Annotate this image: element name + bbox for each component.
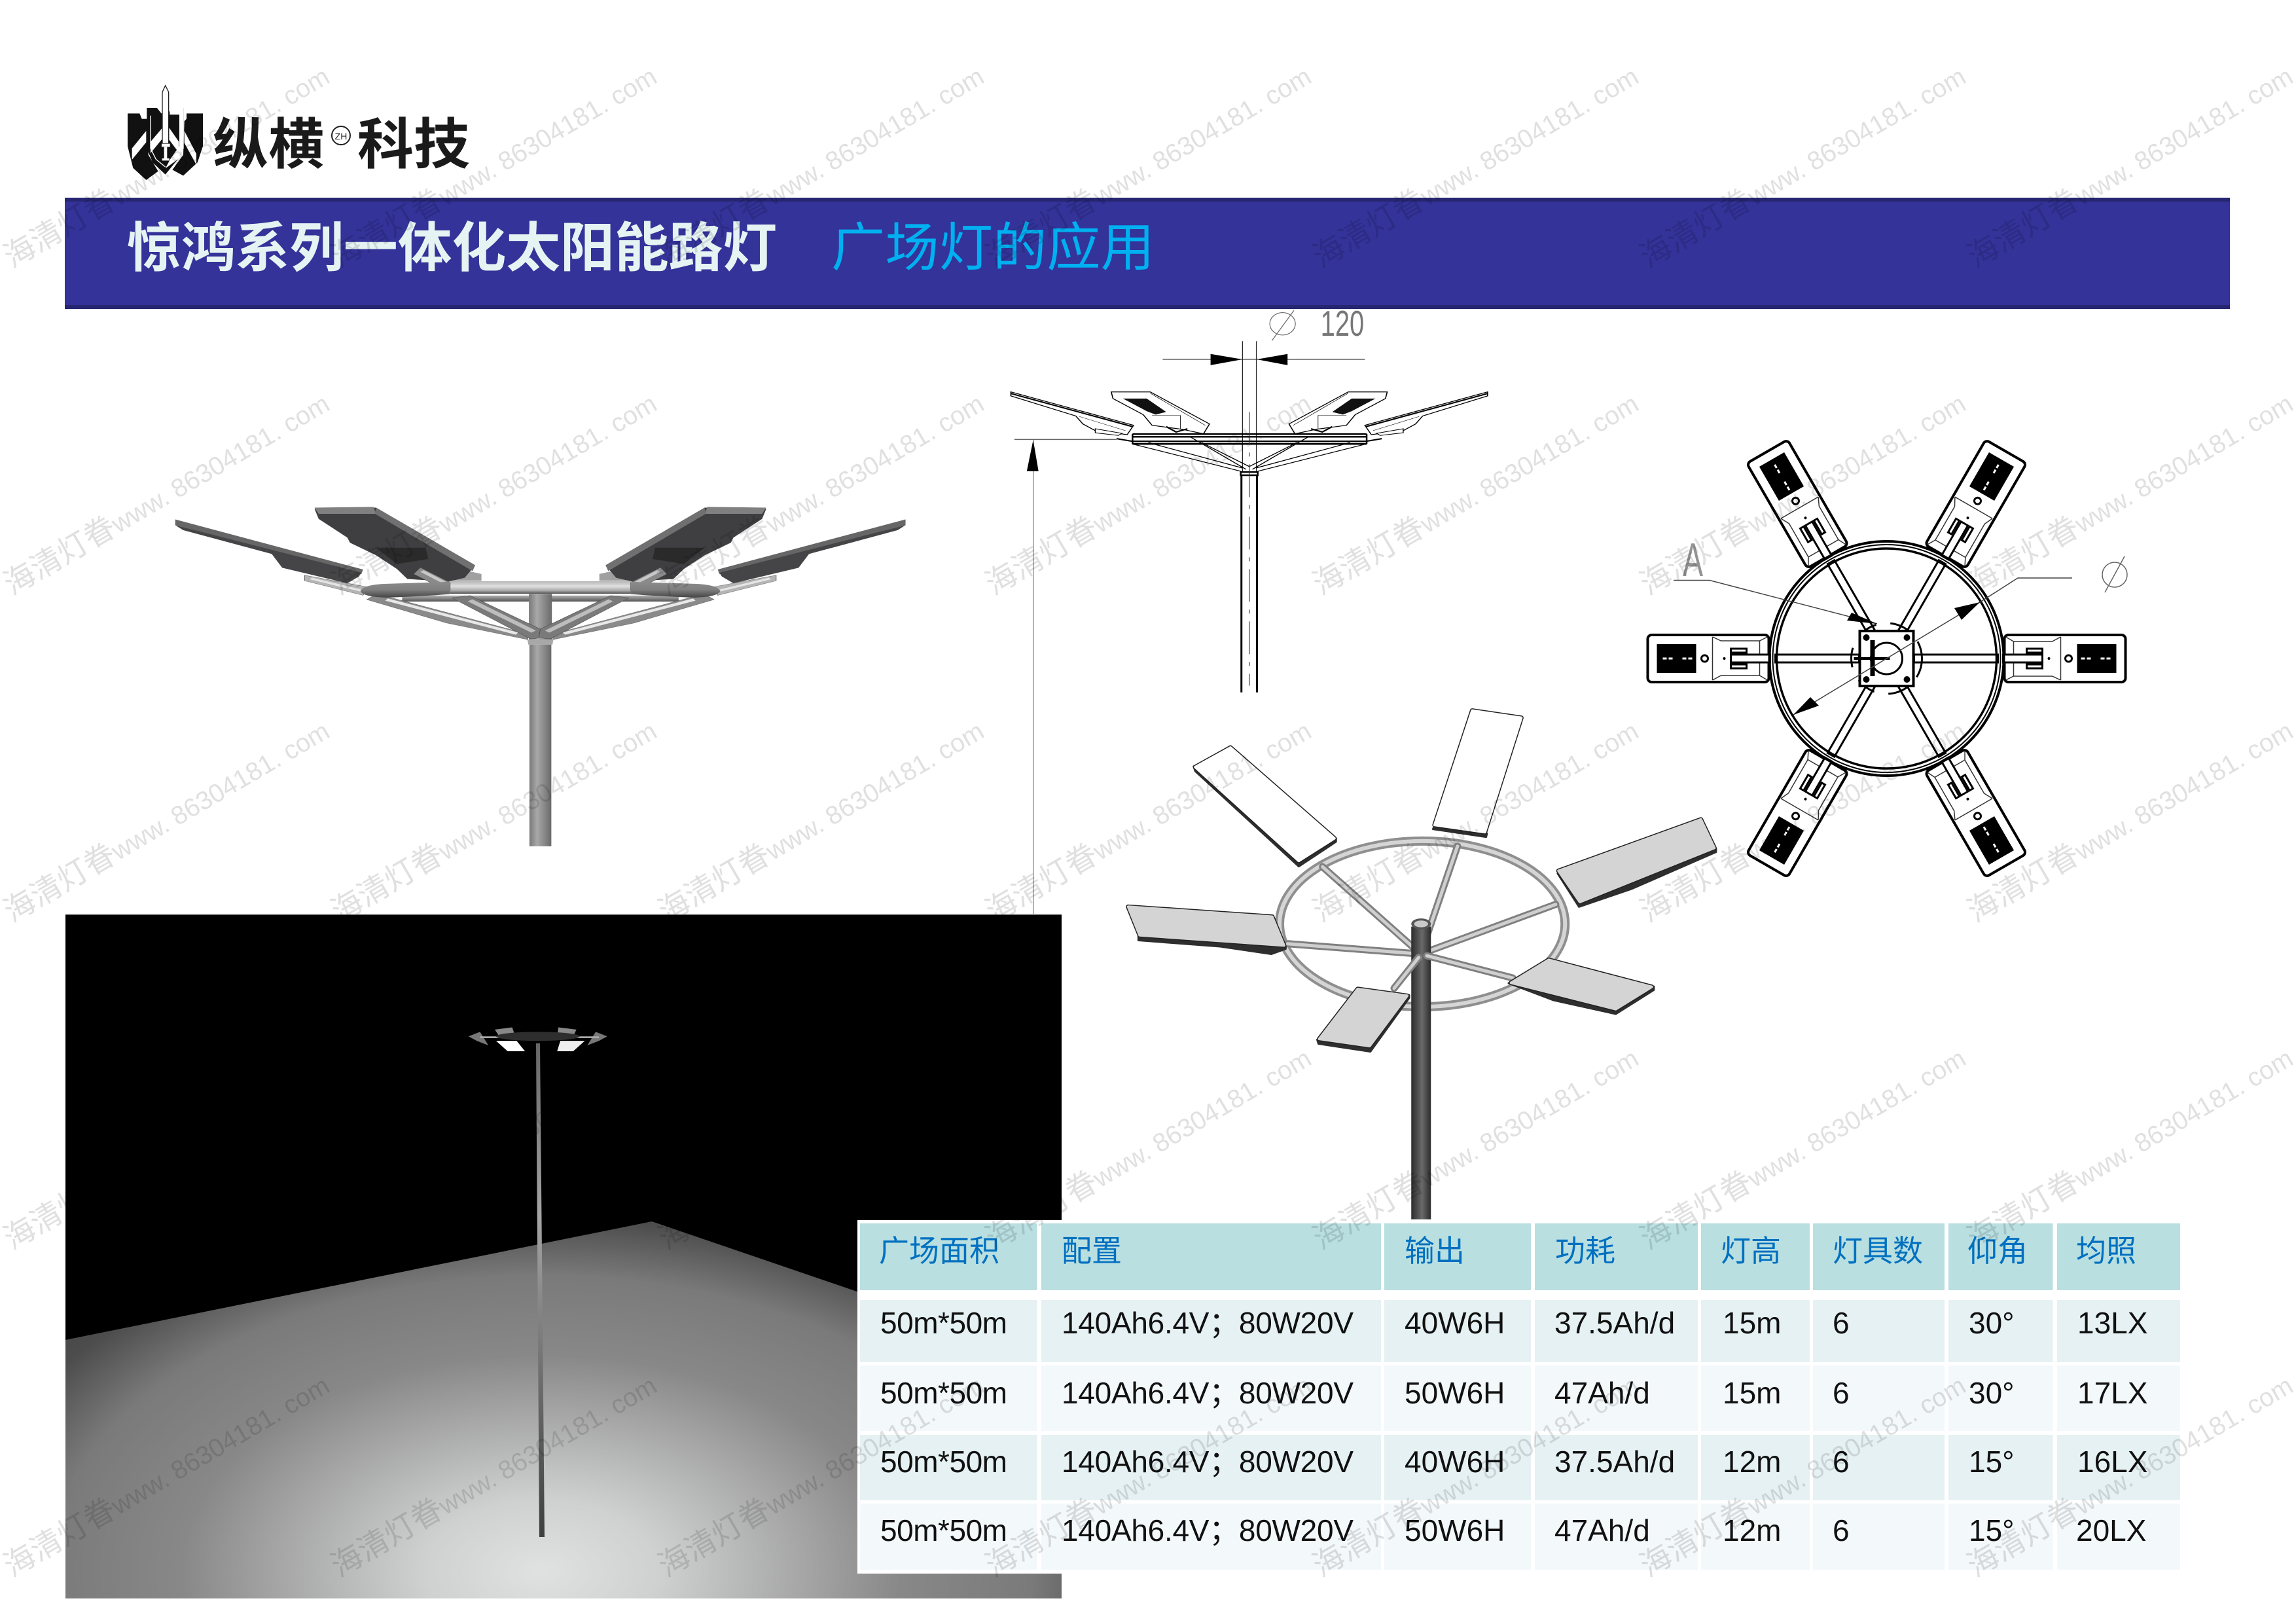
table row 4: 140Ah6.4V；80W20V — [1062, 1513, 1354, 1547]
watermark layer: 海清灯眷www. 86304181. com — [325, 1366, 662, 1583]
watermark layer: 海清灯眷www. 86304181. com — [1306, 57, 1643, 274]
table row 4: 47Ah/d — [1554, 1513, 1650, 1547]
registered mark — [332, 126, 350, 145]
table row 1: 15m — [1723, 1306, 1781, 1340]
arrow: height dimension — [1014, 439, 1117, 915]
watermark layer: 海清灯眷www. 86304181. com — [1306, 1039, 1643, 1256]
table row 2: 15m — [1723, 1376, 1781, 1410]
watermark layer: 海清灯眷www. 86304181. com — [652, 1039, 989, 1256]
watermark layer: 海清灯眷www. 86304181. com — [0, 384, 334, 602]
table row 3 — [860, 1435, 2180, 1500]
watermark layer: 海清灯眷www. 86304181. com — [1961, 57, 2296, 274]
table row 2 — [860, 1365, 2180, 1431]
table row 1: 50m*50m — [880, 1306, 1007, 1340]
subtitle: 广场灯的应用 — [831, 206, 1155, 281]
table row 3: 140Ah6.4V；80W20V — [1062, 1445, 1354, 1479]
watermark layer: 海清灯眷www. 86304181. com — [0, 1039, 334, 1256]
table header row: 广场面积 — [879, 1234, 999, 1268]
ring — [1280, 841, 1565, 1007]
watermark layer: 海清灯眷www. 86304181. com — [1306, 1366, 1643, 1583]
watermark layer: 海清灯眷www. 86304181. com — [1634, 712, 1971, 929]
table row 2: 47Ah/d — [1554, 1376, 1650, 1410]
watermark layer: 海清灯眷www. 86304181. com — [1634, 1039, 1971, 1256]
lamp panel faces — [1128, 711, 1714, 1046]
table header row: 仰角 — [1967, 1234, 2028, 1268]
watermark layer: 海清灯眷www. 86304181. com — [979, 57, 1316, 274]
watermark layer: 海清灯眷www. 86304181. com — [1306, 712, 1643, 929]
watermark layer: 海清灯眷www. 86304181. com — [652, 1366, 989, 1583]
icon: shield logo — [128, 86, 203, 180]
lamp arms — [1648, 440, 2126, 877]
watermark layer: 海清灯眷www. 86304181. com — [325, 712, 662, 929]
table row 3: 40W6H — [1405, 1445, 1505, 1479]
table header row: 功耗 — [1555, 1234, 1615, 1268]
watermark layer: 海清灯眷www. 86304181. com — [325, 57, 662, 274]
table row 2: 140Ah6.4V；80W20V — [1062, 1376, 1354, 1410]
watermark layer: 海清灯眷www. 86304181. com — [652, 384, 989, 602]
brand name part two: 科技 — [357, 101, 470, 180]
lamp head — [469, 1027, 607, 1051]
watermark layer: 海清灯眷www. 86304181. com — [652, 57, 989, 274]
panel: night lighting simulation — [65, 914, 1062, 1598]
callout: leader A: A — [1683, 534, 1703, 586]
brand name: 纵横 — [213, 101, 324, 180]
table row 1: 6 — [1833, 1306, 1850, 1340]
table row 1: 37.5Ah/d — [1554, 1306, 1675, 1340]
watermark layer: 海清灯眷www. 86304181. com — [979, 1366, 1316, 1583]
illuminated floor — [65, 1221, 1062, 1598]
hub — [1851, 623, 1922, 694]
watermark layer: 海清灯眷www. 86304181. com — [1961, 384, 2296, 602]
table row 4: 12m — [1723, 1513, 1781, 1547]
lamp panels — [1128, 711, 1716, 1052]
watermark layer: 海清灯眷www. 86304181. com — [0, 1366, 334, 1583]
watermark layer: 海清灯眷www. 86304181. com — [1961, 1039, 2296, 1256]
lamp heads and arms — [1011, 392, 1488, 471]
watermark layer: 海清灯眷www. 86304181. com — [0, 57, 334, 274]
table header row: 输出 — [1405, 1234, 1465, 1268]
table row 4: 50W6H — [1405, 1513, 1505, 1547]
watermark layer: 海清灯眷www. 86304181. com — [1961, 712, 2296, 929]
table header row: 均照 — [2076, 1234, 2136, 1268]
lamp pole — [536, 1043, 545, 1537]
panel: 3D render of lamp from below — [1128, 711, 1716, 1219]
table row 2: 50m*50m — [880, 1376, 1007, 1410]
table row 3: 15° — [1969, 1445, 2015, 1479]
watermark layer: 海清灯眷www. 86304181. com — [1306, 384, 1643, 602]
watermark layer: 海清灯眷www. 86304181. com — [1634, 384, 1971, 602]
dimension: diameter 120 — [1270, 304, 1364, 344]
panel: 3D render of lamp front view — [175, 507, 906, 846]
table row 2: 30° — [1969, 1376, 2015, 1410]
table row 1 — [860, 1300, 2180, 1362]
table row 1: 13LX — [2077, 1306, 2147, 1340]
pole — [1241, 412, 1258, 693]
watermark layer: 海清灯眷www. 86304181. com — [0, 712, 334, 929]
panel: side view technical drawing — [1011, 304, 1488, 915]
table row 3: 12m — [1723, 1445, 1781, 1479]
table row 3: 50m*50m — [880, 1445, 1007, 1479]
watermark layer: 海清灯眷www. 86304181. com — [979, 384, 1316, 602]
pole — [1411, 918, 1431, 1219]
watermark layer: 海清灯眷www. 86304181. com — [979, 1039, 1316, 1256]
title banner — [65, 198, 2230, 309]
front spokes — [1394, 956, 1513, 988]
ring — [1770, 541, 2004, 776]
watermark layer: 海清灯眷www. 86304181. com — [1634, 57, 1971, 274]
table row 4: 20LX — [2076, 1513, 2146, 1547]
table row 1: 140Ah6.4V；80W20V — [1062, 1306, 1354, 1340]
rear spokes — [1288, 846, 1556, 954]
table row 3: 37.5Ah/d — [1554, 1445, 1675, 1479]
lamp panel outlines — [1128, 711, 1714, 1046]
callout: leader A — [1674, 534, 1877, 624]
table header row: 灯高 — [1721, 1234, 1781, 1268]
table row 3: 16LX — [2077, 1445, 2147, 1479]
watermark layer: 海清灯眷www. 86304181. com — [325, 384, 662, 602]
table row 4: 15° — [1969, 1513, 2015, 1547]
watermark layer: 海清灯眷www. 86304181. com — [979, 712, 1316, 929]
watermark layer: 海清灯眷www. 86304181. com — [652, 712, 989, 929]
table row 4 — [860, 1504, 2180, 1570]
table row 1: 40W6H — [1405, 1306, 1505, 1340]
panel: top view technical drawing — [1648, 440, 2126, 877]
spec table — [857, 1220, 2181, 1574]
watermark layer: 海清灯眷www. 86304181. com — [325, 1039, 662, 1256]
table row 2: 17LX — [2077, 1376, 2147, 1410]
watermark layer: 海清灯眷www. 86304181. com — [1634, 1366, 1971, 1583]
dimension: diameter 120: 120 — [1321, 304, 1364, 344]
lamp undersides — [1138, 767, 1716, 1052]
table row 2: 50W6H — [1405, 1376, 1505, 1410]
callout: ring diameter — [1793, 556, 2127, 715]
arrows: width dimension — [1162, 341, 1365, 472]
table header row: 配置 — [1062, 1234, 1122, 1268]
table header row — [860, 1223, 2180, 1290]
registered mark: ZH — [335, 131, 347, 141]
logo: brand mark and name — [128, 86, 470, 180]
table row 2: 6 — [1833, 1376, 1850, 1410]
title: 惊鸿系列一体化太阳能路灯 — [127, 204, 777, 282]
table row 4: 50m*50m — [880, 1513, 1007, 1547]
table row 3: 6 — [1833, 1445, 1850, 1479]
table header row: 灯具数 — [1833, 1234, 1923, 1268]
watermark layer: 海清灯眷www. 86304181. com — [1961, 1366, 2296, 1583]
table row 4: 6 — [1833, 1513, 1850, 1547]
table row 1: 30° — [1969, 1306, 2015, 1340]
